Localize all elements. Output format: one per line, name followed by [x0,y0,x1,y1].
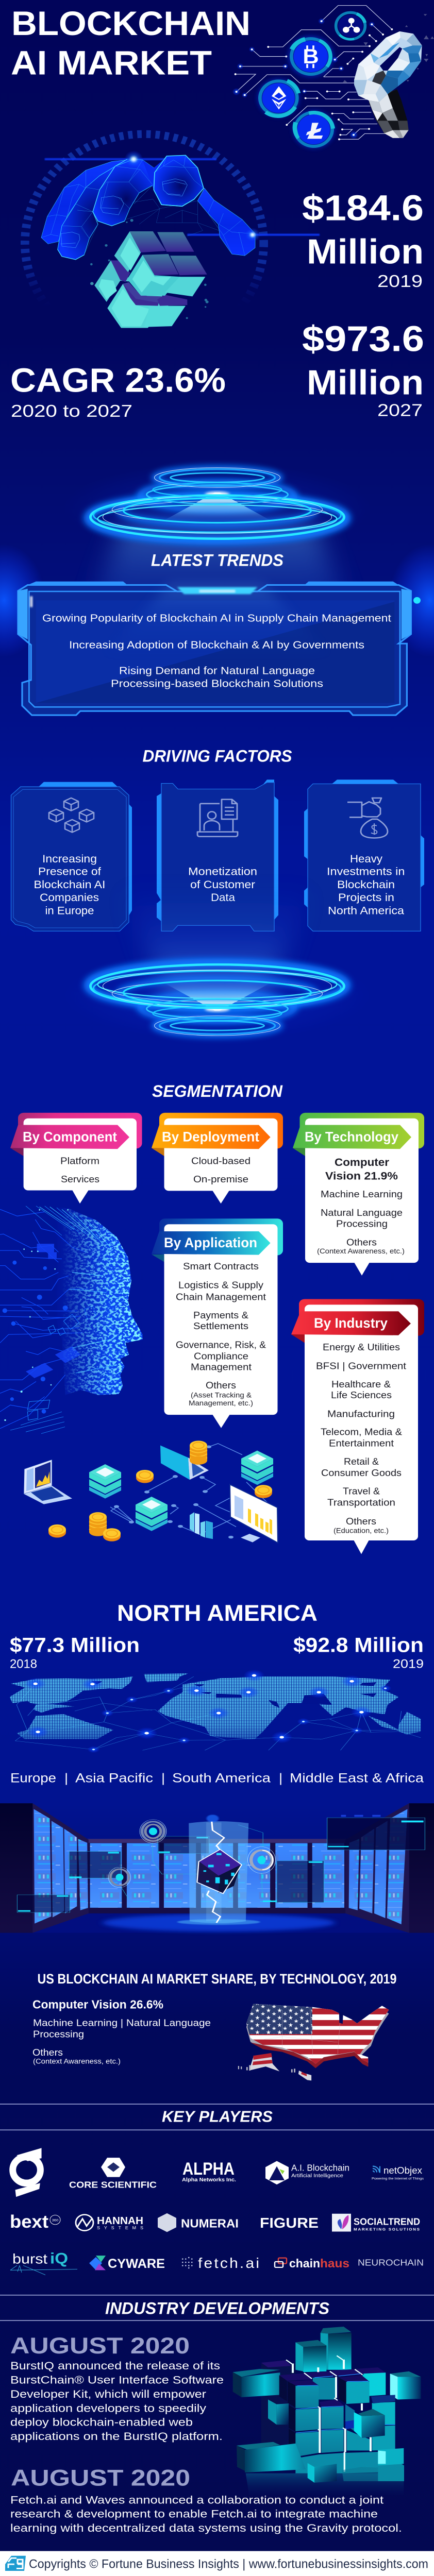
stat: 2018 north america: $77.3 Million [10,1633,140,1656]
development 2: Fetch.ai and Waves announced a collaboration to conduct a joint [10,2494,383,2506]
logo: chainhaus: haus [320,2257,349,2270]
logo: hannah systems: HANNAH [97,2215,143,2227]
logo: alpha: Alpha Networks Inc. [182,2177,236,2183]
stat: 2019 north america [293,1633,424,1671]
title: BLOCKCHAIN [11,5,251,42]
panel: factor 3: Projects in [338,891,394,904]
left racks [34,1809,88,1924]
logo: chainhaus: chain [289,2257,320,2270]
panel: latest trends: Rising Demand for Natural Language [119,665,315,676]
logo: neurochain: NEUROCHAIN [358,2258,424,2267]
panel: factor 3: Blockchain [337,878,395,891]
panel: latest trends: Processing-based Blockchain Solutions [111,677,323,689]
alaska [249,2054,279,2072]
heading: segmentation: SEGMENTATION [152,1082,283,1100]
ribbon: By Application [164,1235,257,1250]
regions list: Asia Pacific [75,1770,153,1785]
icon: US flag map [238,2002,393,2080]
stat: 2027 market size: 2027 [377,401,423,420]
stat: 2027 market size: Million [307,363,424,402]
lower light lens [63,951,372,1040]
panel: by application: (Asset Tracking & [191,1392,252,1399]
heading: driving factors: DRIVING FACTORS [142,748,292,766]
network nodes [25,1669,391,1753]
icon: laptop and document [197,800,238,837]
panel: factor 1 [11,782,132,931]
logo: alpha [182,2159,236,2183]
ribbon: By Industry [314,1315,388,1331]
development 1: BurstChain® User Interface Software [10,2374,224,2386]
logo: netobjex: netObjex [383,2166,422,2176]
development 2: research & development to enable Fetch.ai to integrate machine [10,2508,378,2520]
server center [136,1497,168,1531]
panel: by application: Others [206,1380,236,1391]
ribbon: By Component [23,1129,117,1144]
logo: burst iq [10,2250,77,2275]
US technology list [32,1998,211,2065]
logo: cyware: CYWARE [108,2257,165,2271]
panel: by industry: Consumer Goods [321,1468,402,1479]
panel: by technology: Machine Learning [321,1189,403,1200]
flares [124,150,143,168]
panel: by component [10,1113,142,1204]
development 1: deploy blockchain-enabled web [10,2416,193,2428]
panel: by application: Payments & [193,1310,248,1321]
title [11,5,251,82]
server left [89,1464,121,1499]
stat: CAGR: CAGR 23.6% [10,362,226,399]
panel: by component: Platform [60,1156,99,1166]
side walls [0,1803,32,1933]
panel: by industry: Telecom, Media & [321,1427,402,1437]
panel: factor 1: Blockchain AI [34,878,105,891]
panel: by technology [293,1113,424,1276]
logo: netobjex [372,2166,424,2181]
coin: litecoin [292,110,335,149]
panel: factor 1: in Europe [45,904,94,917]
logo: bext360: bext [10,2211,48,2232]
panel: by industry: Others [346,1516,376,1527]
laptop center [160,1445,209,1480]
logo: socialtrend: SOCIALTREND [354,2217,420,2227]
panel: by industry: BFSI | Government [316,1361,407,1371]
logo: chainhaus [275,2257,349,2270]
illustration: AI head with circuits [0,1204,148,1434]
development 2: learning with decentralized data systems using the Gravity protocol. [10,2522,402,2534]
regions list: | [64,1770,68,1785]
panel: by application: Logistics & Supply [178,1280,263,1291]
text: Monetization [188,866,257,877]
bottom blocks [237,2442,404,2483]
panel: factor 2: Data [211,891,236,904]
targets [109,1820,275,1888]
panel: by industry: Manufacturing [327,1409,395,1419]
monitor [230,1484,278,1543]
stat: CAGR [10,362,226,421]
panel: by application: Settlements [193,1321,248,1332]
fingertips [60,179,187,248]
development 1: application developers to speedily [10,2402,206,2414]
ribbon [293,1125,411,1149]
bar blocks [190,1512,213,1539]
side bars [233,2369,421,2400]
circuit lines [236,6,392,139]
tick ring [25,134,264,352]
logo: g mark [13,2148,42,2197]
panel: factor 2: of Customer [190,878,255,891]
panel: by application: Smart Contracts [183,1261,259,1272]
illustration: wireframe hand over cube [25,134,320,352]
title: AI MARKET [11,44,212,82]
reflection [246,2473,404,2495]
network lines [110,1444,268,1534]
stat: 2019 market size: $184.6 [302,188,424,228]
illustration: crypto coins and chain [232,6,434,149]
hud boxes [17,1818,425,1912]
panel: by application: Chain Management [176,1292,266,1302]
panel: by industry: Transportation [327,1497,395,1508]
panel: by application [152,1218,283,1428]
panel: by application: Compliance [194,1351,248,1362]
ribbon: By Deployment [162,1129,259,1144]
logo: hannah systems: SYSTEMS [97,2225,143,2230]
ribbon [152,1231,271,1255]
panel: factor 3: North America [328,904,405,917]
development 1: BurstIQ announced the release of its [10,2360,220,2372]
logo: numerai [158,2213,239,2232]
server right [241,1451,273,1485]
stat: 2019 market size: 2019 [377,272,423,291]
cube [197,1850,242,1893]
logos: key players [10,2148,424,2275]
development 1 [10,2333,224,2443]
ribbon [10,1125,129,1149]
stat: 2018 north america [10,1633,140,1671]
region heading: NORTH AMERICA [117,1600,318,1626]
stat: 2019 market size: Million [307,232,424,272]
laptop left [24,1460,72,1504]
panel: factor 2 [157,779,278,931]
regions list: Europe [10,1770,56,1785]
panel: by technology: Vision 21.9% [325,1170,398,1182]
development 1: applications on the BurstIQ platform. [10,2430,223,2443]
panel: by technology: Processing [336,1219,388,1230]
logo: burst iq: iQ [50,2250,68,2267]
logo: hannah systems [76,2215,143,2231]
stat: 2019 north america: $92.8 Million [293,1633,424,1656]
floating cube [354,2409,385,2438]
logo: figure: FIGURE [260,2215,319,2231]
panel: factor 3 [304,779,424,931]
main cube [268,2355,395,2473]
US technology list: (Context Awareness, etc.) [33,2058,121,2065]
icon: Fortune Business Insights logo [5,2556,26,2571]
cube blocks [94,231,207,328]
stat: 2018 north america: 2018 [10,1657,37,1671]
panel: by industry: Energy & Utilities [323,1342,400,1353]
panel: by application: Governance, Risk, & [176,1340,266,1350]
panel: by application: Management, etc.) [189,1399,253,1408]
center column [189,1821,248,1923]
world map [10,1669,421,1753]
side glows [0,544,434,657]
logo: core scientific: CORE SCIENTIFIC [69,2180,157,2190]
regions list: | [279,1770,282,1785]
panel: by industry: Entertainment [329,1438,394,1449]
stat: 2027 market size [302,319,424,420]
icon: investment money bag [347,798,388,838]
heading: latest trends: LATEST TRENDS [151,552,283,570]
upper light lens [62,463,376,677]
text: Increasing [42,853,97,865]
panel: by industry: (Education, etc.) [333,1527,389,1535]
lightning [207,1822,224,1923]
coins [48,1524,66,1537]
logo: fetch.ai: fetch.ai [198,2256,259,2272]
logo: a.i. blockchain: A.I. Blockchain [291,2163,349,2173]
logo: alpha: ALPHA [182,2159,235,2179]
logo: core scientific [69,2158,157,2190]
panel: factor 1: Companies [40,891,99,904]
logo: burst iq: burst [12,2251,47,2266]
stat: 2027 market size: $973.6 [302,319,424,359]
coin stack top [190,1440,207,1465]
logo: numerai: NUMERAI [181,2217,239,2230]
back racks [90,1843,344,1908]
ribbon [152,1125,271,1149]
logo: bext360: 360 [52,2218,58,2222]
development 1: Developer Kit, which will empower [10,2388,206,2400]
stat: 2019 north america: 2019 [393,1657,424,1671]
logo: socialtrend: MARKETING SOLUTIONS [354,2227,420,2232]
flare lines [45,158,216,160]
panel: by component: Services [61,1174,99,1185]
US technology list: Machine Learning | Natural Language [33,2018,211,2028]
development 1: AUGUST 2020 [10,2333,190,2359]
panel: by industry: Retail & [344,1456,379,1467]
panel: by technology: Natural Language [321,1208,403,1218]
section rule and heading: key players: KEY PLAYERS [162,2108,273,2125]
top cubes [295,2327,352,2372]
ribbon [291,1311,411,1335]
panel: by application: Management [191,1362,252,1372]
panel: by technology: (Context Awareness, etc.) [317,1247,405,1256]
panel: by technology: Computer [335,1156,389,1168]
icon: connected blocks [49,798,94,833]
right racks [349,1809,407,1924]
regions list: | [161,1770,165,1785]
panel: factor 1: Presence of [38,866,102,877]
cube particles [90,219,209,319]
panel: by technology: Others [346,1237,377,1248]
panel: factor 3: Investments in [327,866,405,877]
panel: by deployment: On-premise [193,1174,248,1185]
panel: by industry [291,1299,424,1554]
light beam over cards [119,885,314,1002]
coin [255,1485,272,1498]
panel: by industry: Healthcare & [331,1379,391,1390]
coin: bitcoin [288,35,334,78]
coin [136,1470,154,1483]
text: Heavy [350,853,382,865]
coin: ethereum [257,78,300,117]
panel: latest trends [18,582,411,715]
section rule and heading: industry developments: INDUSTRY DEVELOPMENTS [105,2300,329,2318]
coin: bitcoin: B [303,45,319,68]
logo: cyware [89,2256,165,2271]
mesh lines [41,155,255,256]
US technology list: Others [32,2047,63,2058]
US technology list: Computer Vision 26.6% [32,1998,163,2011]
logo: a.i. blockchain: Artificial Intelligence [291,2173,343,2179]
coin: ripple [336,12,365,39]
panel: by industry: Life Sciences [331,1390,392,1401]
US technology list: Processing [33,2029,84,2040]
illustration: blockchain data center [0,1803,434,1933]
illustration: isometric blockchain network [24,1440,278,1543]
panel: by deployment: Cloud-based [191,1156,251,1166]
back wall [83,1839,352,1843]
stat: CAGR: 2020 to 2027 [11,402,132,421]
logo: socialtrend [332,2214,420,2232]
logo: a.i. blockchain [265,2161,349,2184]
stat: 2019 market size [302,188,424,291]
regions list: Middle East & Africa [290,1770,424,1785]
trend text: Growing Popularity of Blockchain AI in Supply Chain Management [42,612,391,624]
regions list [10,1770,424,1785]
panel: by deployment [152,1113,283,1204]
panel: latest trends: Increasing Adoption of Blockchain & AI by Governments [69,639,364,651]
development 2 [10,2465,402,2534]
fingers [41,155,255,260]
back dark columns [261,2364,295,2464]
illustration: teal 3D cubes [233,2327,421,2495]
development 2: AUGUST 2020 [11,2465,190,2490]
footer [0,2551,434,2576]
connector lines [83,1825,277,1903]
ribbon: By Technology [305,1129,399,1144]
polygon chain link [354,31,422,138]
floor [0,1913,434,1933]
regions list: South America [172,1770,271,1785]
logo: netobjex: Powering the Internet of Things [372,2177,424,2181]
panel: by industry: Travel & [343,1486,380,1497]
